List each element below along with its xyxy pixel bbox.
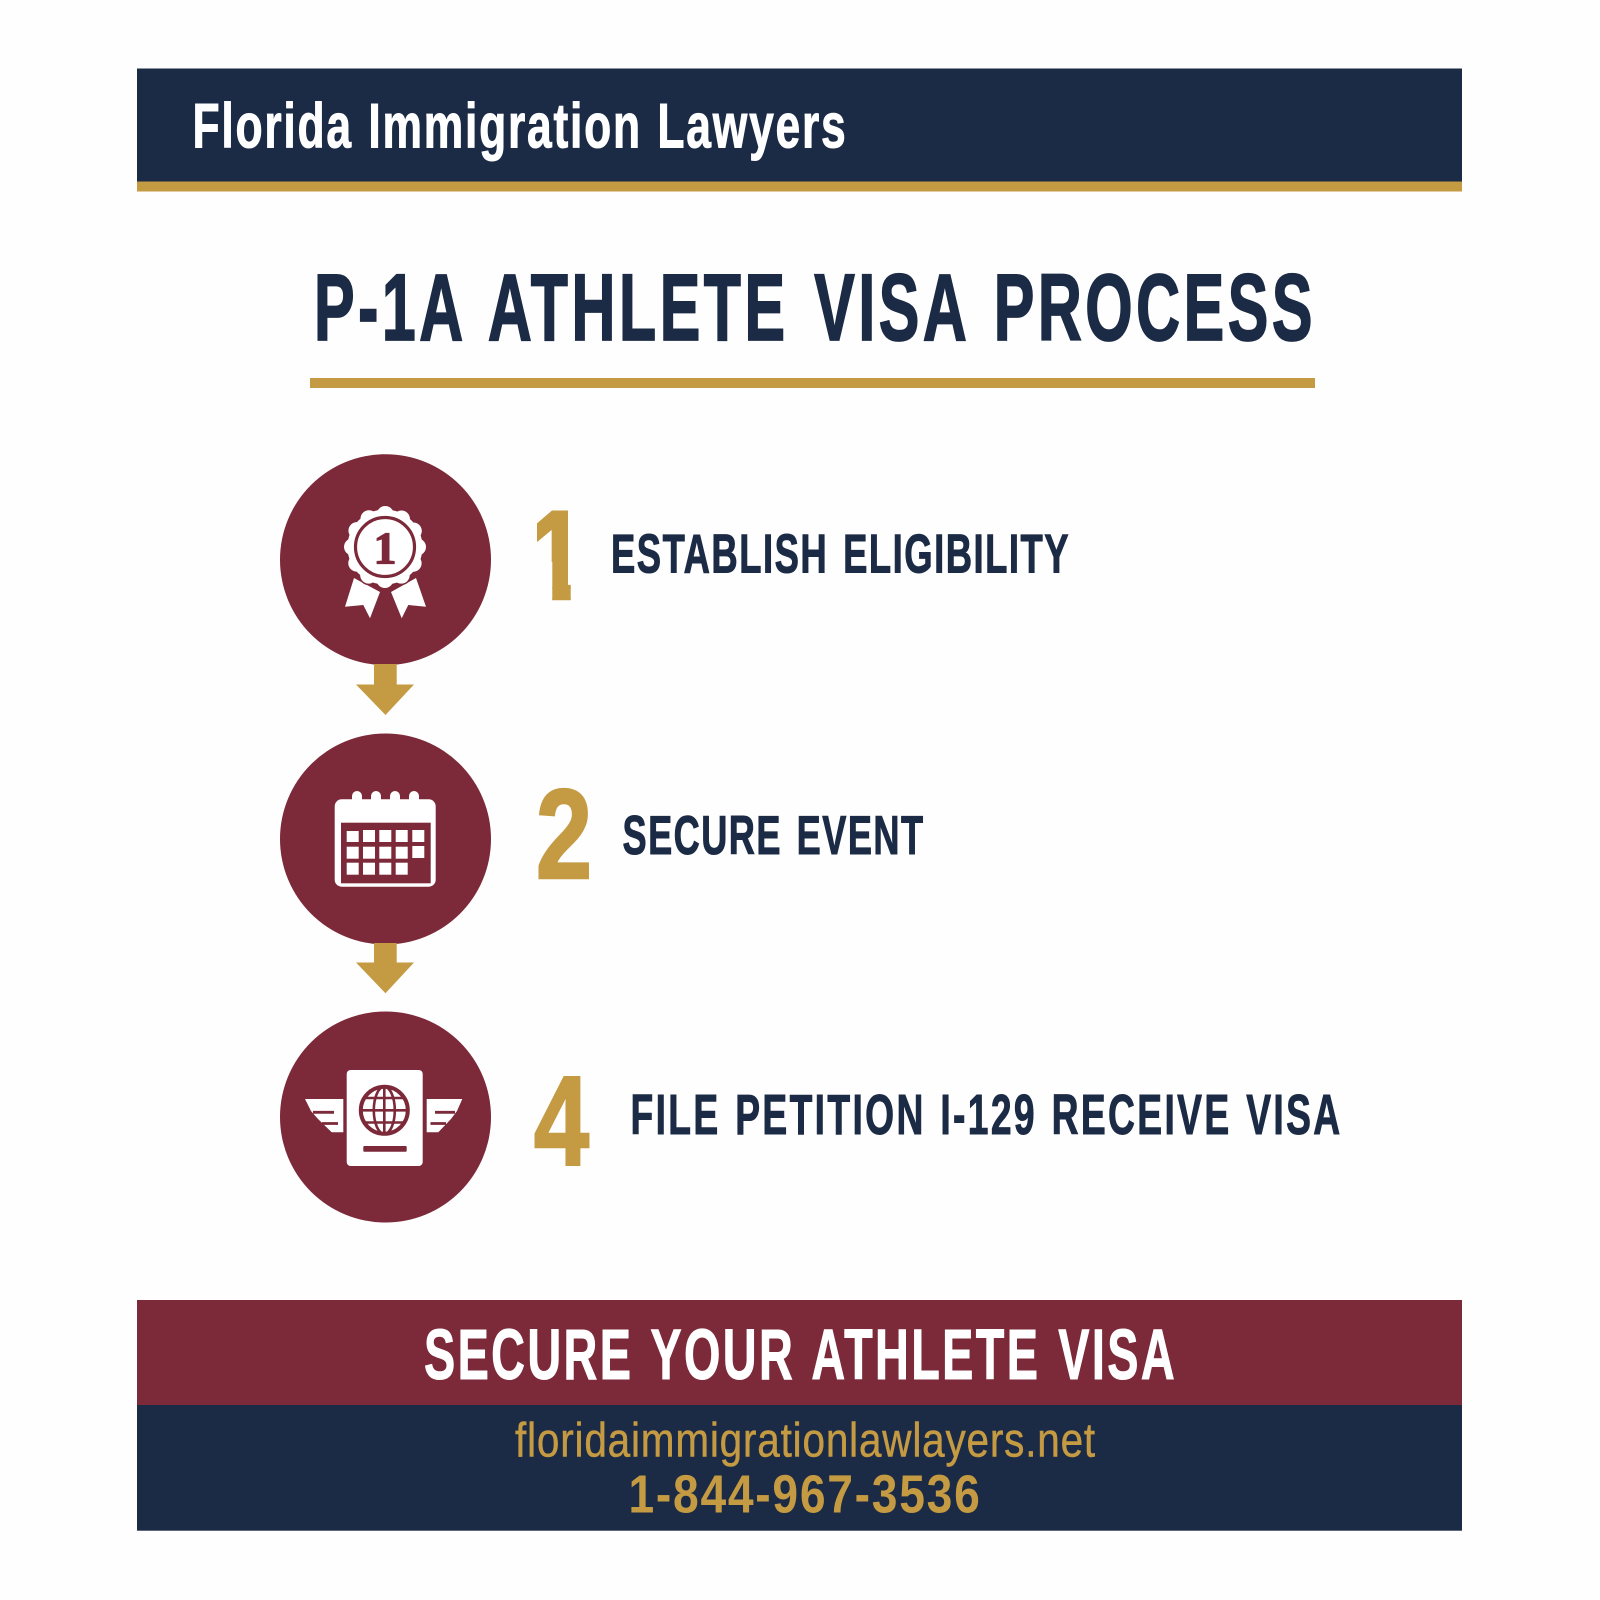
header banner (137, 68, 1462, 192)
step 2 number: 2 (536, 763, 592, 905)
step 1 label: ESTABLISH ELIGIBILITY (611, 523, 1070, 584)
main title (310, 255, 1316, 388)
step 1 number: 1 (530, 484, 584, 628)
contact band (137, 1405, 1462, 1531)
header brand name: Florida Immigration Lawyers (192, 92, 848, 162)
arrow: step 2 to step 3 (356, 943, 414, 993)
step 3 icon: passport with wings (280, 1012, 491, 1222)
arrow: step 1 to step 2 (356, 664, 414, 715)
step 3 number: 4 (534, 1050, 589, 1192)
phone number: 1-844-967-3536 (628, 1465, 982, 1525)
website address: floridaimmigrationlawlayers.net (515, 1414, 1096, 1468)
infographic canvas (137, 68, 1462, 1531)
step 2 icon: calendar (280, 734, 491, 944)
call-to-action text: SECURE YOUR ATHLETE VISA (424, 1315, 1177, 1395)
step 2 label: SECURE EVENT (622, 804, 924, 866)
step 1 icon: award rosette: 1 (374, 522, 396, 574)
call-to-action band (137, 1300, 1462, 1405)
step 1 icon: award rosette (280, 454, 491, 665)
